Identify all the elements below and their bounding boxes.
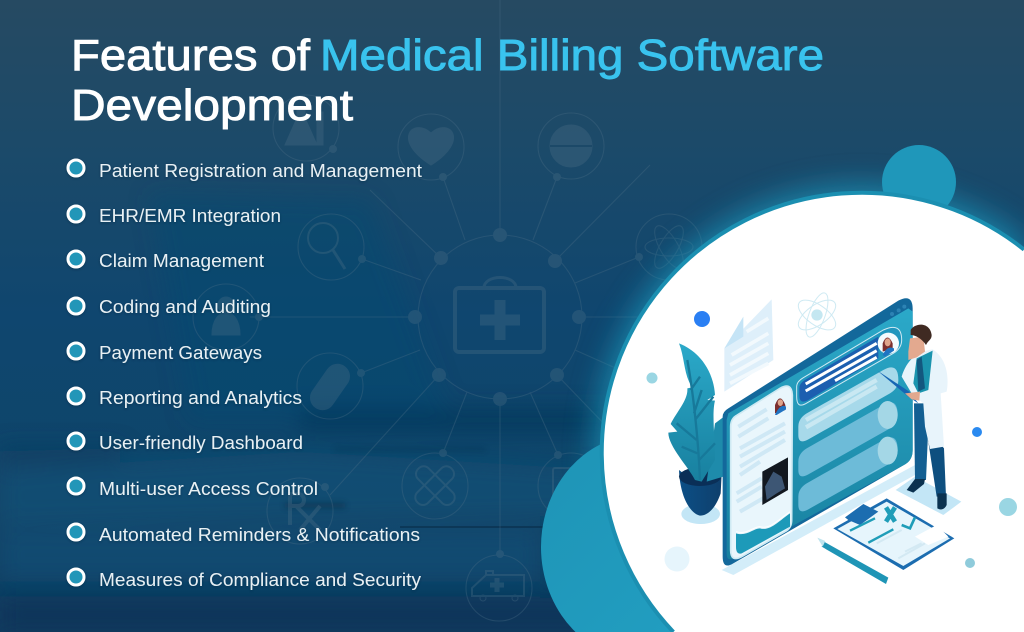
white circle panel: [602, 193, 1024, 632]
teal blob bottom left: [541, 435, 739, 632]
central ring with first aid kit: [408, 228, 586, 406]
item 10: Measures of Compliance and Security: [99, 570, 421, 590]
pencil: [817, 538, 888, 584]
item 4: Coding and Auditing: [99, 297, 271, 317]
icon: ambulance: [466, 550, 532, 621]
icon: heart: [398, 114, 464, 181]
item 2: EHR/EMR Integration: [99, 206, 281, 226]
title: Development: [71, 81, 353, 130]
clipboard: [833, 498, 954, 570]
left patient panel: [731, 386, 792, 559]
icon: atom: [635, 214, 702, 280]
floor shadows: [681, 465, 961, 575]
item 1: Patient Registration and Management: [99, 161, 422, 181]
item 9: Automated Reminders & Notifications: [99, 525, 420, 545]
item 6: Reporting and Analytics: [99, 388, 302, 408]
item 8: Multi-user Access Control: [99, 479, 318, 499]
icon: flask: [273, 95, 339, 161]
icon: magnifier: [298, 214, 366, 280]
item 5: Payment Gateways: [99, 343, 262, 363]
document: [724, 299, 773, 392]
monitor: [723, 298, 913, 566]
rows: [798, 367, 898, 511]
teal circle top: [882, 145, 956, 219]
title: Medical Billing Software: [320, 31, 824, 80]
icon: rx: [267, 478, 333, 544]
item 3: Claim Management: [99, 251, 264, 271]
icon: bandage: [402, 449, 468, 519]
atom icon: [794, 290, 840, 340]
illustration: doctor at medical billing dashboard: [668, 290, 961, 584]
connector lines: [250, 0, 660, 552]
icon: tablet: [538, 113, 604, 181]
icon: capsule: [297, 353, 365, 419]
doctor figure: [877, 325, 948, 509]
icon: clipboard: [538, 451, 604, 519]
decorative dots: [646, 311, 1017, 572]
plant: [668, 343, 724, 516]
top search bar: [797, 327, 902, 405]
title: [71, 31, 824, 130]
teal glow around white circle: [594, 185, 1024, 632]
feature list: [68, 160, 422, 590]
item 7: User-friendly Dashboard: [99, 433, 303, 453]
medical network background: [193, 0, 702, 621]
title: Features of: [71, 31, 311, 80]
icon: doctor: [193, 284, 263, 350]
